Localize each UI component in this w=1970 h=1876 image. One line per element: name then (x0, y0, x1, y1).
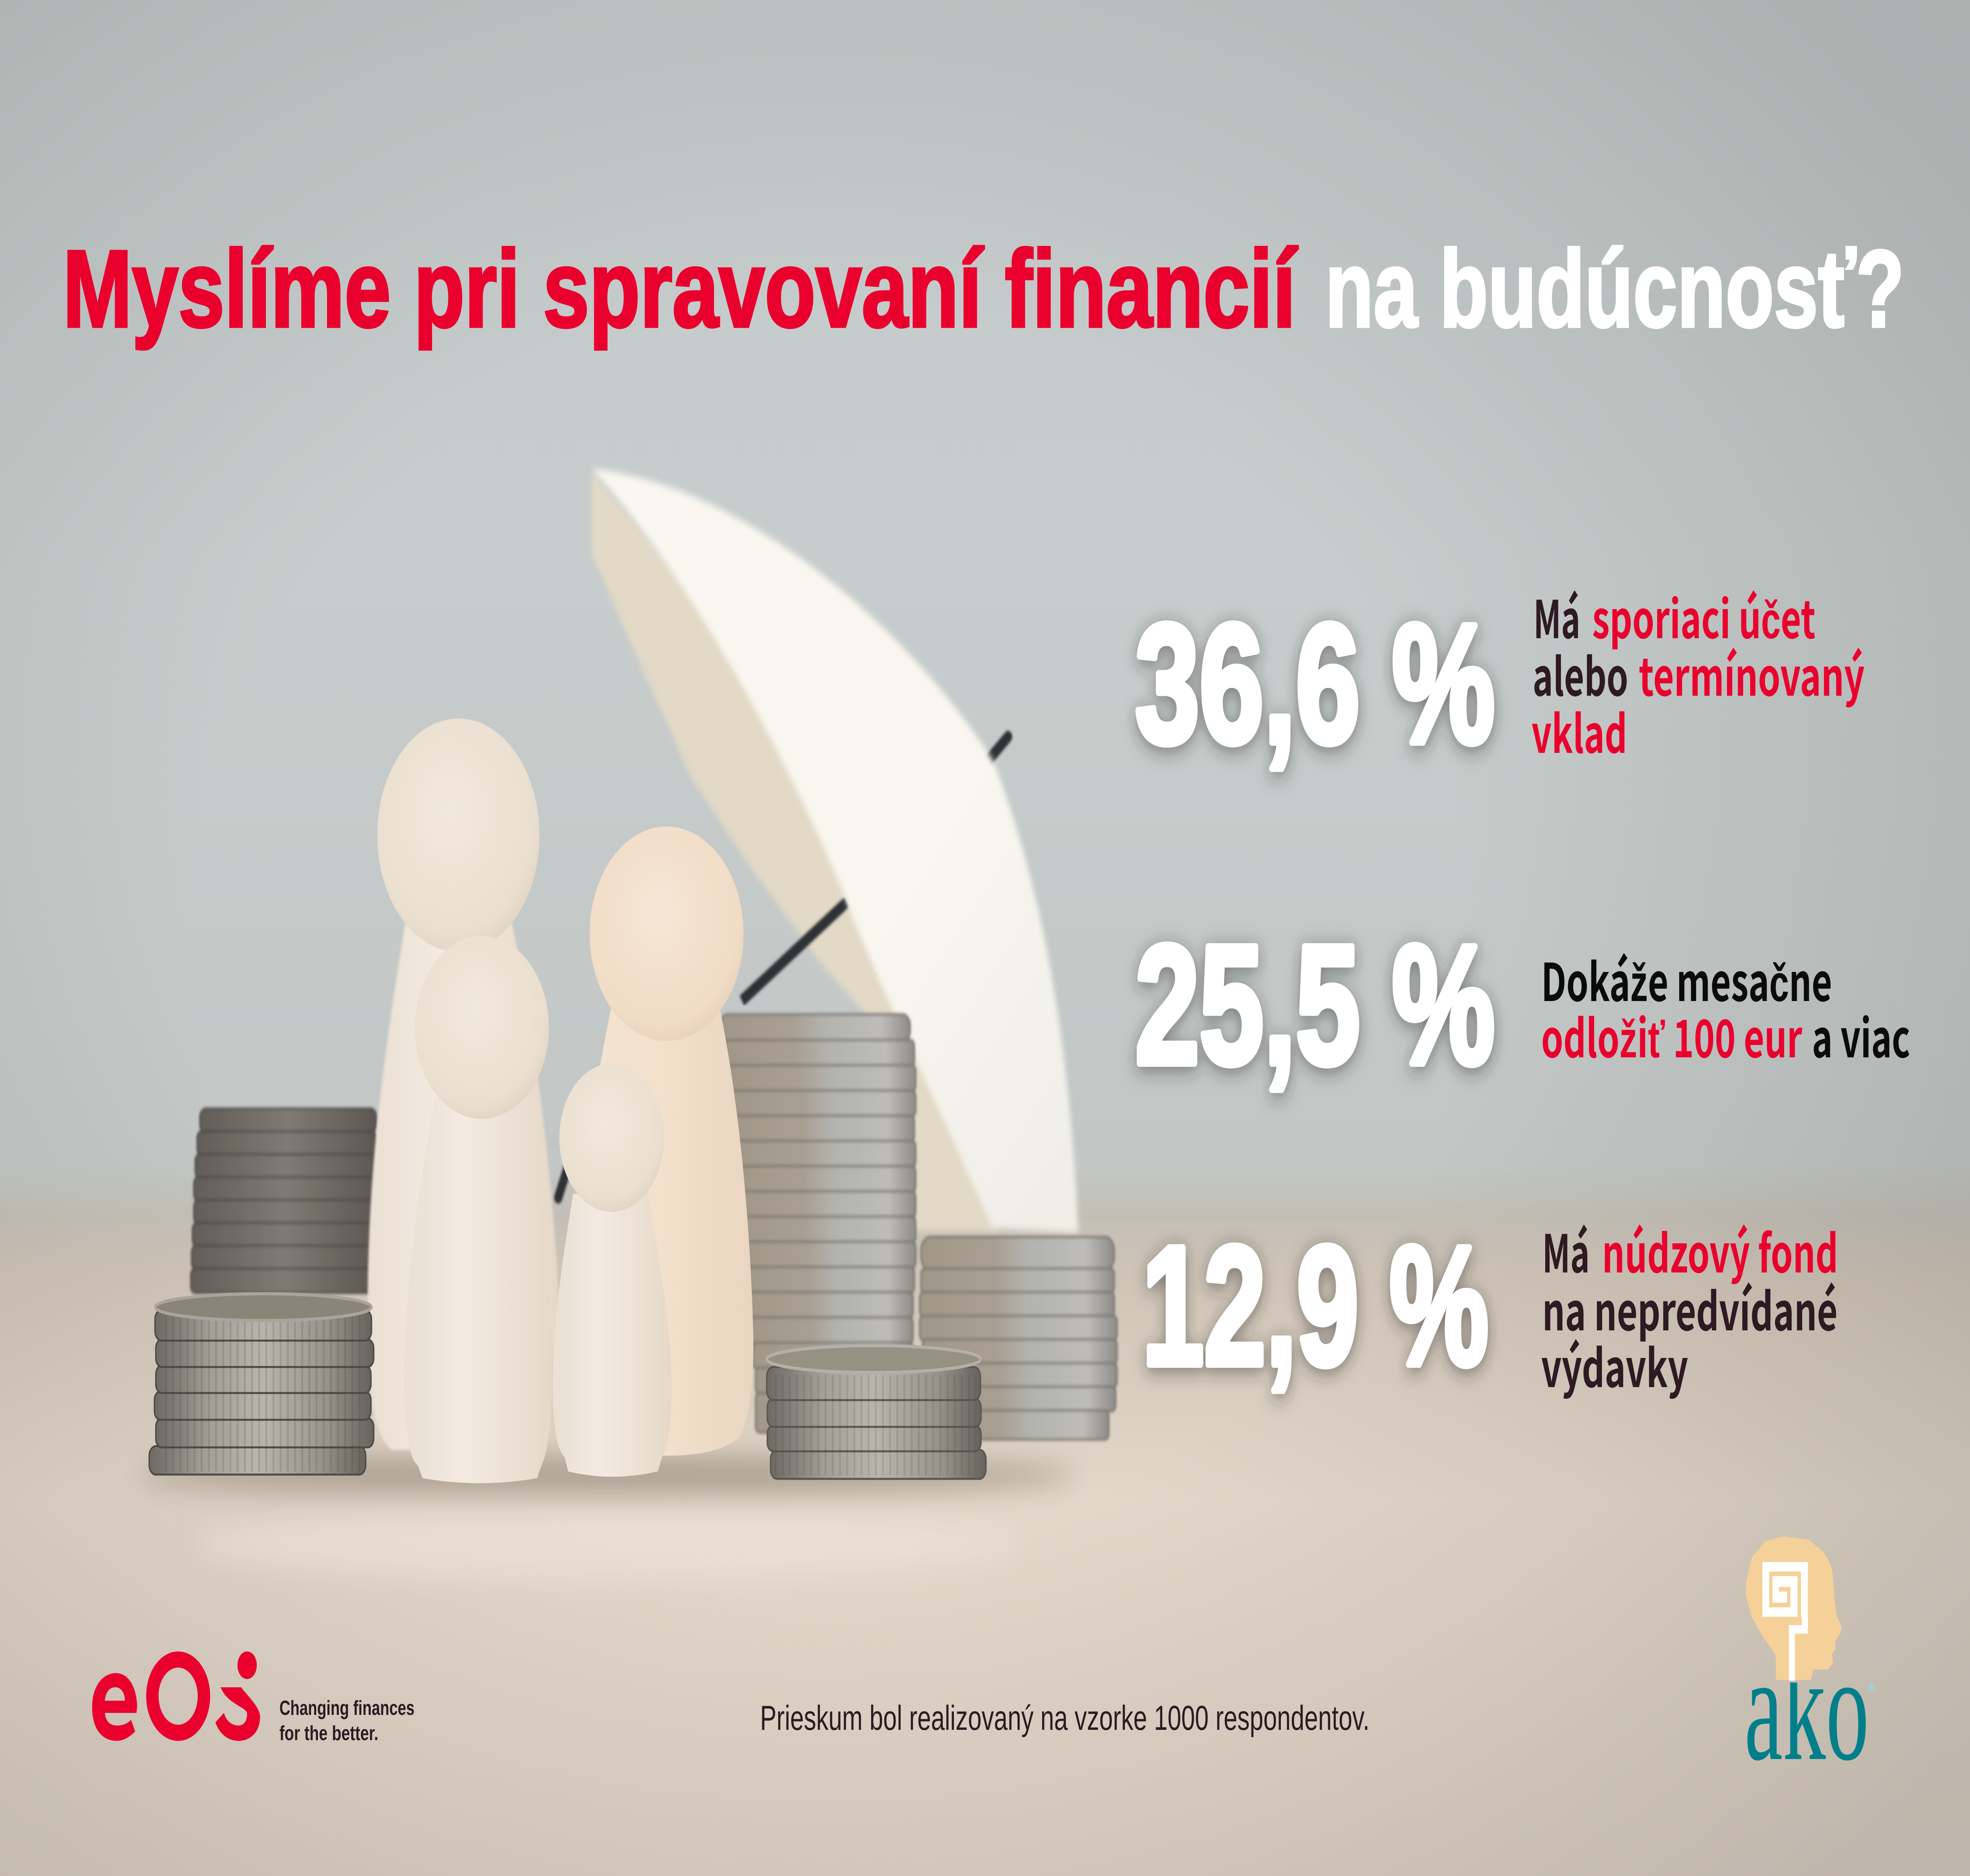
stat 3 description (1541, 1212, 1838, 1402)
AKO spiral (1762, 1562, 1808, 1681)
stat 2 description: a viac (1812, 997, 1910, 1072)
AKO wordmark: ako (1744, 1624, 1869, 1792)
stat row 3 (1142, 1211, 1838, 1402)
coin stack: front middle (767, 1346, 986, 1479)
stat 1 description: Má (1533, 578, 1580, 653)
figure: right (568, 827, 753, 1456)
stat 2 description: Dokáže mesačne (1541, 941, 1832, 1016)
EOS mark (92, 1651, 260, 1741)
stat 1 description: alebo (1533, 635, 1628, 711)
stat row 2 (1135, 910, 1910, 1100)
coin stack: back left (191, 1109, 376, 1293)
coin stack: right low (920, 1237, 1117, 1440)
coin stack: front left (149, 1294, 374, 1475)
coin top face (155, 1294, 372, 1321)
figure: tall back (368, 719, 559, 1450)
EOS tagline: for the better. (279, 1721, 378, 1745)
figure: front left (404, 936, 552, 1483)
stat 1 description: termínovaný (1639, 635, 1865, 711)
stat number 36,6 %: 36,6 % (1135, 589, 1495, 778)
stat 3 description: núdzový fond (1602, 1212, 1838, 1287)
title white part: na budúcnosť? (1325, 228, 1904, 350)
stat number 25,5 %: 25,5 % (1135, 910, 1495, 1100)
umbrella handle (558, 737, 1008, 1198)
footnote: Prieskum bol realizovaný na vzorke 1000 respondentov. (760, 1699, 1370, 1738)
EOS tagline: Changing finances (279, 1696, 414, 1720)
EOS tagline (279, 1696, 414, 1745)
AKO registered mark (1868, 1683, 1874, 1691)
title (63, 228, 1904, 350)
contact shadow on table (138, 1456, 1076, 1495)
AKO logo (1745, 1536, 1874, 1761)
stat 3 description: Má (1542, 1212, 1590, 1287)
figure: small child (553, 1064, 672, 1477)
umbrella underside (591, 473, 998, 1231)
umbrella handle centre (742, 902, 847, 1001)
stat 1 description: vklad (1531, 693, 1627, 768)
coin ridges (775, 1375, 976, 1475)
stat 3 description: výdavky (1541, 1327, 1688, 1402)
stat 1 description (1531, 578, 1865, 768)
stat row 1 (1135, 578, 1865, 778)
coin ridges (163, 1316, 361, 1471)
stat 1 description: sporiaci účet (1592, 578, 1816, 653)
coin top face (767, 1346, 981, 1373)
stat 2 description (1541, 941, 1910, 1072)
stat number 12,9 %: 12,9 % (1142, 1211, 1489, 1400)
EOS logo (92, 1651, 414, 1745)
photo: umbrella, wooden family figures and coin stacks (138, 469, 1117, 1580)
stat 3 description: na nepredvídané (1542, 1270, 1838, 1345)
umbrella canopy (591, 469, 1078, 1233)
AKO head silhouette (1745, 1536, 1842, 1680)
coin stack: back right tall (720, 1014, 916, 1432)
stat 2 description: odložiť 100 eur (1541, 997, 1803, 1072)
title red part: Myslíme pri spravovaní financií (63, 228, 1298, 350)
table reflection (193, 1509, 1020, 1580)
